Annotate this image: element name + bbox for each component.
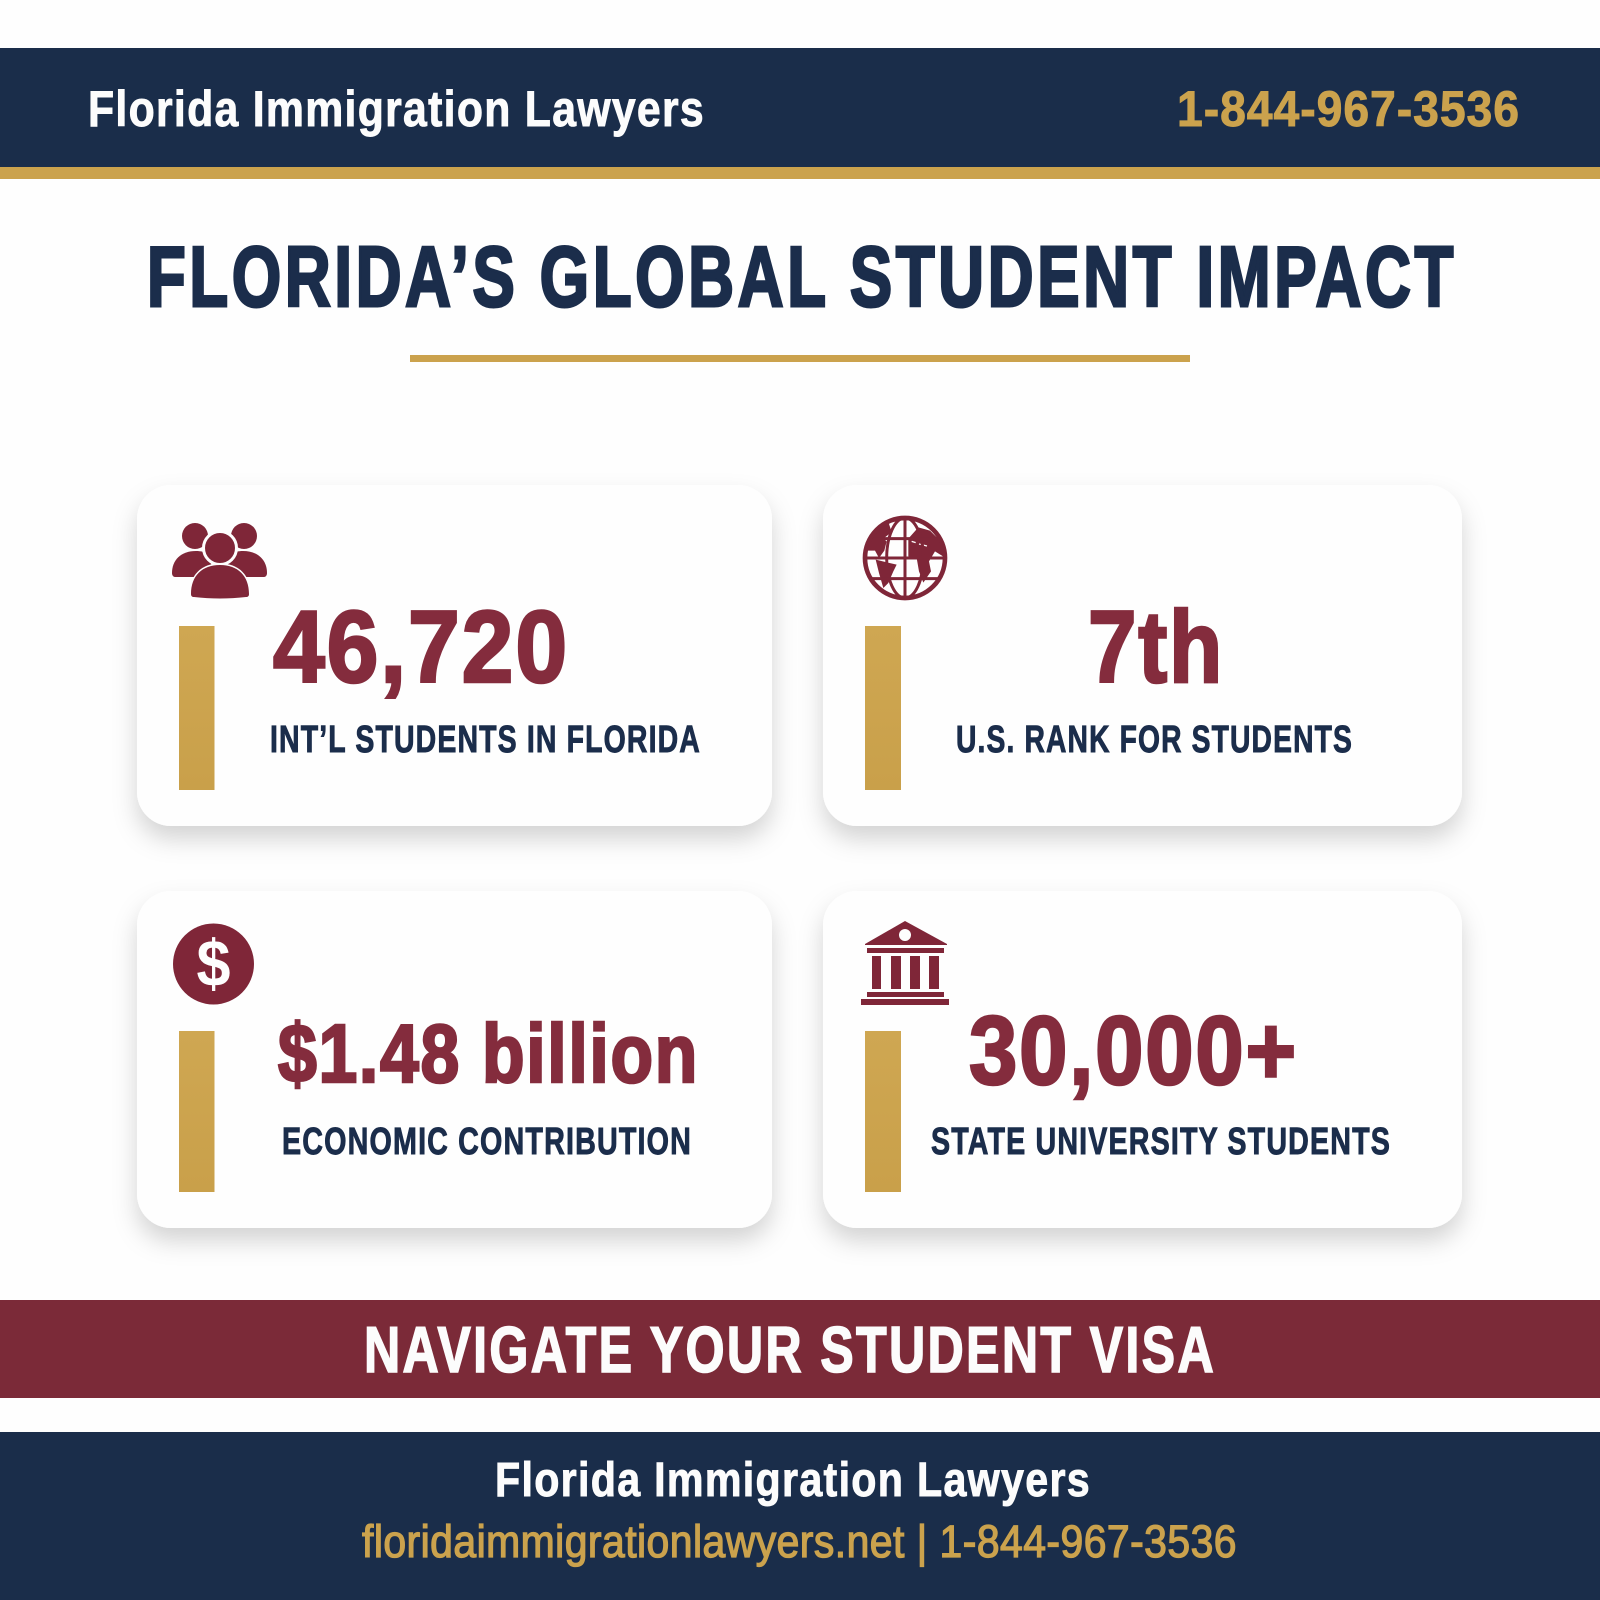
stat label: STATE UNIVERSITY STUDENTS (931, 1121, 1391, 1163)
icon: globe (865, 518, 946, 598)
footer contact line: floridaimmigrationlawyers.net | 1-844-967-3536 (362, 1516, 1237, 1567)
footer band (0, 1432, 1600, 1600)
accent bar (865, 1031, 901, 1192)
icon: group of people (172, 523, 267, 598)
panel: economic contribution (137, 891, 772, 1228)
header band (0, 48, 1600, 179)
statistic: 7th (1088, 590, 1224, 704)
header firm name: Florida Immigration Lawyers (88, 81, 705, 137)
accent bar (179, 1031, 214, 1192)
icon: university building (861, 921, 949, 1005)
icon: dollar coin: $ (196, 926, 230, 1000)
stat label: U.S. RANK FOR STUDENTS (956, 719, 1353, 761)
stat label: INT’L STUDENTS IN FLORIDA (270, 719, 701, 761)
panel: international students (137, 485, 772, 826)
footer firm name: Florida Immigration Lawyers (495, 1454, 1091, 1507)
statistic: 46,720 (273, 590, 569, 704)
stat label: ECONOMIC CONTRIBUTION (282, 1121, 692, 1163)
call to action band: NAVIGATE YOUR STUDENT VISA (364, 1313, 1216, 1386)
panel: national rank (823, 485, 1462, 826)
accent bar (865, 626, 901, 790)
title underline (410, 355, 1190, 362)
statistic: 30,000+ (969, 996, 1298, 1105)
statistic: $1.48 billion (278, 1007, 699, 1100)
header phone number: 1-844-967-3536 (1177, 81, 1520, 137)
accent bar (179, 626, 214, 790)
call to action band (0, 1300, 1600, 1398)
icon: dollar coin (173, 924, 254, 1004)
panel: state university students (823, 891, 1462, 1228)
